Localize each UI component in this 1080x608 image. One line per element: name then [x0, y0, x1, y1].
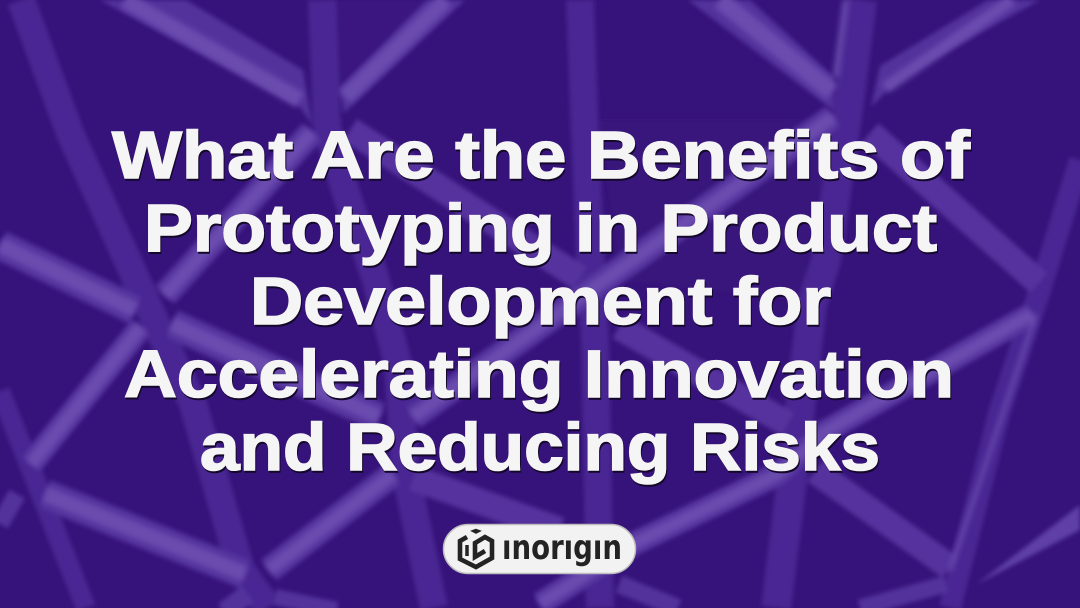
title: Prototyping in Product [144, 191, 937, 266]
icon: hexagonal cube mark [460, 530, 492, 567]
title: Accelerating Innovation [124, 337, 954, 412]
logo wordmark: inorigin [502, 528, 622, 568]
logo badge [442, 524, 636, 574]
title: Development for [250, 264, 831, 339]
title: and Reducing Risks [200, 410, 880, 485]
title: What Are the Benefits of [112, 118, 971, 193]
